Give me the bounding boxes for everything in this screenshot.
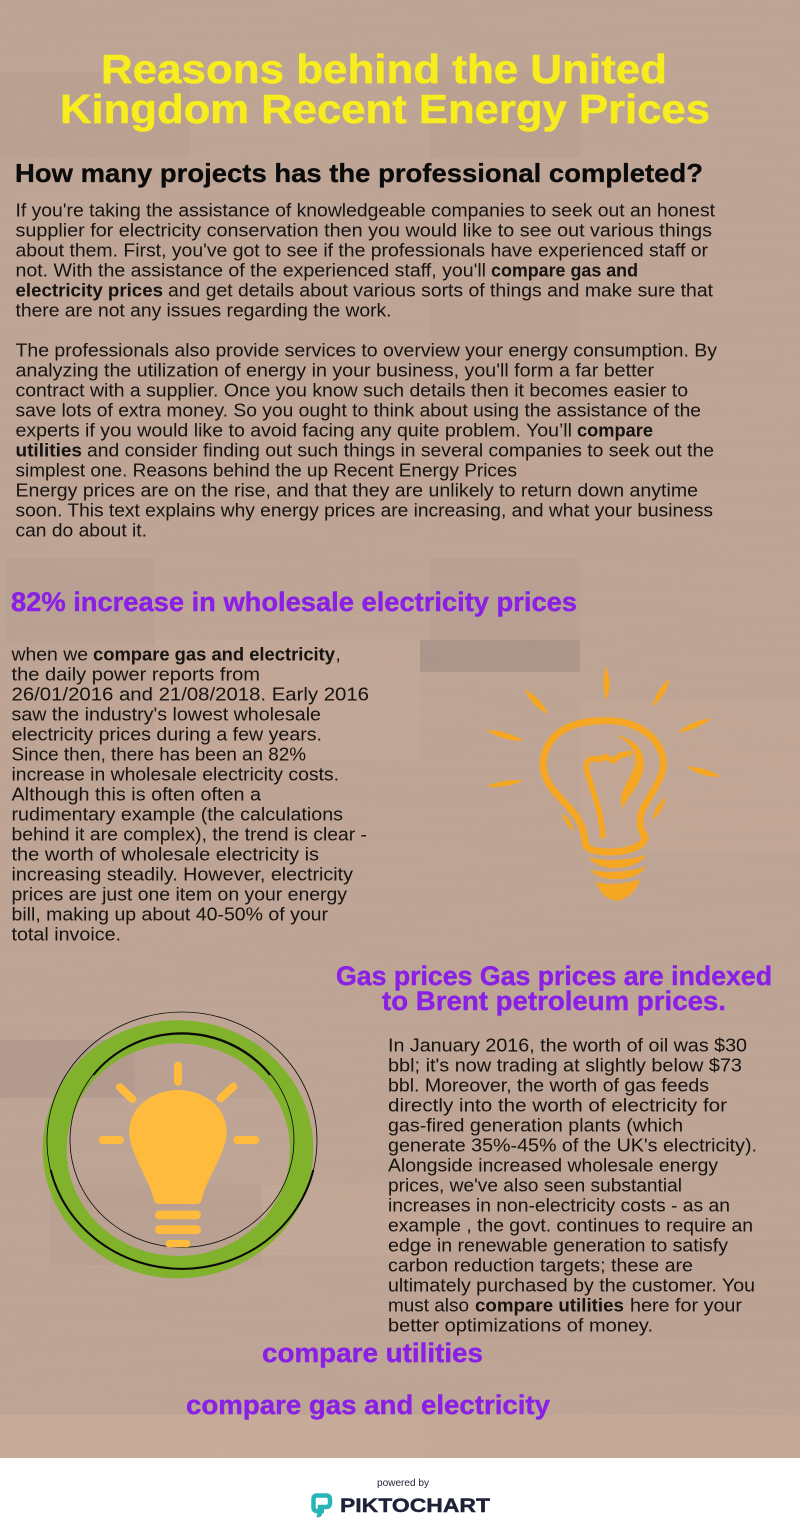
text block: gas prices: gas-fired generation plants (which xyxy=(388,1114,683,1136)
link: compare utilities: compare utilities xyxy=(262,1338,483,1368)
text block: wholesale electricity: total invoice. xyxy=(12,924,121,944)
text block: gas prices: bbl. Moreover, the worth of gas feeds xyxy=(388,1074,709,1096)
piktochart wordmark: PIKTOCHART xyxy=(340,1496,490,1517)
text block: wholesale electricity: when we xyxy=(10,644,88,664)
text block: wholesale electricity: prices are just one item on your energy xyxy=(12,884,348,904)
text block: gas prices: edge in renewable generation to satisfy xyxy=(388,1234,729,1256)
text block: wholesale electricity: bill, making up about 40-50% of your xyxy=(12,904,328,924)
text block: intro paragraph one xyxy=(16,200,716,320)
text block: intro paragraph two: soon. This text explains why energy prices are increasing, and what your business xyxy=(16,500,713,520)
text block: intro paragraph two: simplest one. Reasons behind the up Recent Energy Prices xyxy=(16,460,517,480)
text block: gas prices: must also xyxy=(388,1294,469,1316)
heading: how many projects: How many projects has the professional completed? xyxy=(15,158,703,188)
text block: wholesale electricity: increasing steadily. However, electricity xyxy=(12,864,354,884)
text block: wholesale electricity: saw the industry's lowest wholesale xyxy=(12,704,321,724)
footer xyxy=(0,1458,800,1538)
text block: intro paragraph one: there are not any issues regarding the work. xyxy=(16,300,392,320)
text block: intro paragraph one: supplier for electricity conservation then you would like to see out various things xyxy=(16,220,712,240)
text block: wholesale electricity: electricity prices during a few years. xyxy=(12,724,322,744)
heading: gas prices: Gas prices Gas prices are indexed xyxy=(336,961,772,991)
text block: wholesale electricity: Although this is often often a xyxy=(12,784,262,804)
text block: gas prices: carbon reduction targets; these are xyxy=(388,1254,693,1276)
title: Kingdom Recent Energy Prices xyxy=(60,86,710,132)
text block: intro paragraph one: compare gas and xyxy=(491,260,638,280)
text block: gas prices: increases in non-electricity costs - as an xyxy=(388,1194,730,1216)
text block: intro paragraph two: Energy prices are on the rise, and that they are unlikely to return down anytime xyxy=(16,480,698,500)
icon: yellow bulb in green ring xyxy=(43,1012,317,1278)
text block: gas prices xyxy=(388,1034,757,1336)
text block: wholesale electricity: 26/01/2016 and 21/08/2018. Early 2016 xyxy=(12,684,369,704)
text block: gas prices: here for your xyxy=(630,1294,742,1316)
text block: intro paragraph two: contract with a supplier. Once you know such details then it becomes easier to xyxy=(16,380,688,400)
text block: gas prices: ultimately purchased by the customer. You xyxy=(388,1274,755,1296)
text block: wholesale electricity xyxy=(10,644,369,944)
text block: wholesale electricity: rudimentary example (the calculations xyxy=(12,804,343,824)
text block: intro paragraph two: utilities xyxy=(16,440,82,460)
text block: wholesale electricity: behind it are complex), the trend is clear - xyxy=(12,824,367,844)
text block: gas prices: example , the govt. continues to require an xyxy=(388,1214,753,1236)
title xyxy=(60,46,710,132)
text block: intro paragraph one: not. With the assistance of the experienced staff, you'll xyxy=(16,260,486,280)
text block: intro paragraph one: If you're taking the assistance of knowledgeable companies to seek out an honest xyxy=(16,200,716,220)
powered by label: powered by xyxy=(377,1478,429,1489)
text block: gas prices: Alongside increased wholesale energy xyxy=(388,1154,719,1176)
text block: intro paragraph two: and consider finding out such things in several companies to seek out the xyxy=(87,440,714,460)
text block: intro paragraph two: save lots of extra money. So you ought to think about using the assistance of the xyxy=(16,400,701,420)
text block: wholesale electricity: the worth of wholesale electricity is xyxy=(12,844,319,864)
text block: wholesale electricity: Since then, there has been an 82% xyxy=(12,744,306,764)
text block: gas prices: generate 35%-45% of the UK's electricity). xyxy=(388,1134,757,1156)
text block: wholesale electricity: the daily power reports from xyxy=(12,664,260,684)
text block: gas prices: directly into the worth of electricity for xyxy=(388,1094,727,1116)
icon: hand-drawn orange light bulb xyxy=(486,667,721,901)
text block: gas prices: compare utilities xyxy=(475,1294,624,1316)
heading: gas prices: to Brent petroleum prices. xyxy=(382,986,726,1016)
text block: intro paragraph one: and get details about various sorts of things and make sure that xyxy=(168,280,714,300)
heading: gas prices xyxy=(336,961,772,1016)
text block: intro paragraph two: experts if you would like to avoid facing any quite problem. You’ll xyxy=(16,420,572,440)
text block: intro paragraph two: can do about it. xyxy=(16,520,147,540)
link: compare gas and electricity: compare gas and electricity xyxy=(186,1390,550,1420)
text block: gas prices: In January 2016, the worth of oil was $30 xyxy=(388,1034,747,1056)
text block: intro paragraph one: about them. First, you've got to see if the professionals have experienced staff or xyxy=(16,240,708,260)
text block: gas prices: better optimizations of money. xyxy=(388,1314,653,1336)
heading: wholesale electricity: 82% increase in wholesale electricity prices xyxy=(11,587,577,617)
text block: wholesale electricity: compare gas and electricity xyxy=(93,644,336,664)
title: Reasons behind the United xyxy=(101,46,667,92)
text block: intro paragraph one: electricity prices xyxy=(16,280,163,300)
text block: wholesale electricity: increase in wholesale electricity costs. xyxy=(12,764,339,784)
icon: piktochart logo xyxy=(314,1496,330,1515)
text block: gas prices: bbl; it's now trading at slightly below $73 xyxy=(388,1054,742,1076)
text block: intro paragraph two xyxy=(16,340,718,540)
text block: intro paragraph two: compare xyxy=(577,420,653,440)
text block: wholesale electricity: , xyxy=(336,644,341,664)
text block: intro paragraph two: The professionals also provide services to overview your energy consumption. By xyxy=(16,340,718,360)
text block: intro paragraph two: analyzing the utilization of energy in your business, you'll form a far better xyxy=(16,360,654,380)
text block: gas prices: prices, we've also seen substantial xyxy=(388,1174,682,1196)
